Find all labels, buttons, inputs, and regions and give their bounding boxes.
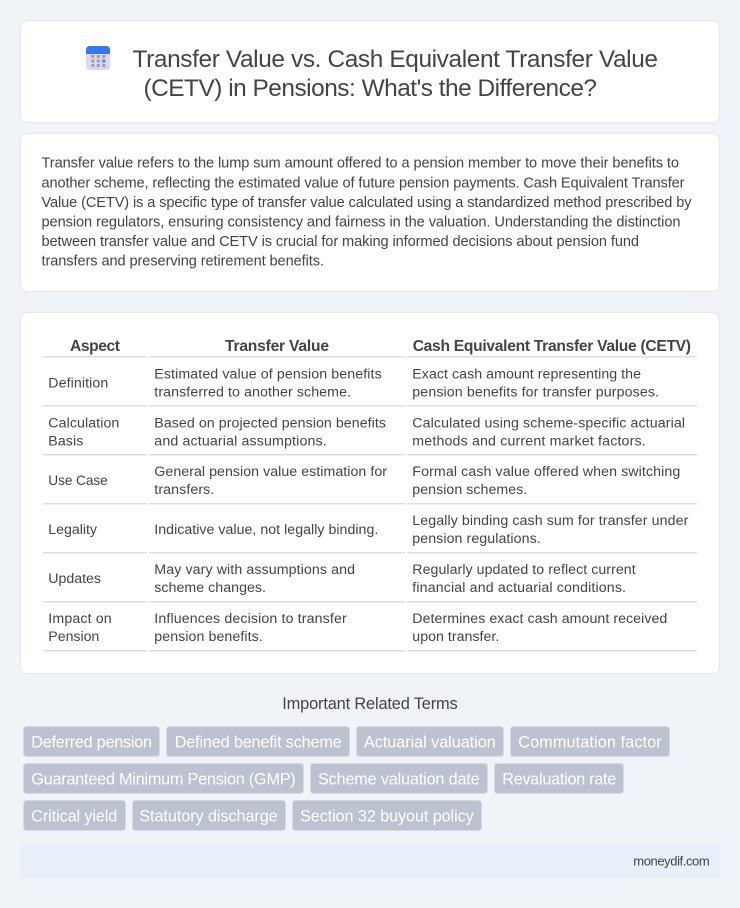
text block: introduction: between transfer value and CETV is crucial for making informed decisions about pension fund [42,234,639,250]
table header row [43,338,697,358]
text block: introduction: Transfer value refers to the lump sum amount offered to a pension member to move their benefits to [42,156,679,172]
table row: impact on pension: upon transfer. [412,629,499,645]
table header row: Cash Equivalent Transfer Value (CETV) [413,338,691,355]
tag: actuarial valuation [356,726,504,756]
title [132,46,658,102]
tag: scheme valuation date [310,764,488,794]
tag: section 32 buyout policy: Section 32 buyout policy [300,807,475,825]
table row: updates [43,562,697,602]
icon: calendar [86,46,110,70]
tag: guaranteed minimum pension: Guaranteed Minimum Pension (GMP) [31,770,296,788]
table row: impact on pension: Pension [48,629,99,645]
tag: actuarial valuation: Actuarial valuation [364,733,496,751]
table row: updates: financial and actuarial conditions. [412,580,626,596]
tag: defined benefit scheme [166,726,350,756]
table row: updates: May vary with assumptions and [154,562,355,578]
table row: definition: Definition [48,376,108,392]
panel: title card [20,20,720,122]
table row: legality: Indicative value, not legally binding. [154,522,378,538]
footer bar [20,844,720,878]
tag: deferred pension [24,726,160,756]
tag: revaluation rate: Revaluation rate [502,770,616,788]
table row: legality: Legally binding cash sum for transfer under [412,513,689,529]
table row: impact on pension: pension benefits. [154,629,263,645]
table row: legality [43,513,697,554]
heading: important related terms: Important Related Terms [282,695,458,713]
tag: critical yield: Critical yield [31,807,117,825]
title: (CETV) in Pensions: What's the Difference? [144,75,597,102]
footer bar: moneydif.com [633,853,710,868]
table row: use case: General pension value estimation for [154,464,387,480]
table row: impact on pension: Influences decision to transfer [154,611,347,627]
table header row: Aspect [70,338,120,355]
table row: calculation basis: Calculation [48,415,119,431]
title: Transfer Value vs. Cash Equivalent Transfer Value [132,46,658,73]
table row: updates: scheme changes. [154,580,266,596]
table row: definition: Exact cash amount representing the [412,366,641,382]
text block: introduction: another scheme, reflecting the estimated value of future pension payments. Cash Equivalent Transfer [42,175,685,191]
table row: calculation basis: Calculated using scheme-specific actuarial [412,415,685,431]
tag: section 32 buyout policy [292,800,482,830]
table row: calculation basis: Based on projected pension benefits [154,415,386,431]
tag: defined benefit scheme: Defined benefit scheme [175,733,342,751]
text block: introduction: transfers and preserving retirement benefits. [42,254,324,270]
table header row: Transfer Value [225,338,329,355]
table row: calculation basis: methods and current market factors. [412,433,646,449]
table row: updates: Updates [48,571,101,587]
text block: introduction: Value (CETV) is a specific type of transfer value calculated using a standardized method prescribed by [42,195,692,211]
tag: statutory discharge [132,800,286,830]
tag: commutation factor: Commutation factor [518,733,662,751]
table row: impact on pension: Determines exact cash amount received [412,611,667,627]
table row: use case: transfers. [154,482,214,498]
table row: calculation basis: Basis [48,433,83,449]
table row: use case: Use Case [48,473,108,488]
text block: introduction [42,156,692,270]
panel: intro paragraph [20,134,720,292]
table row: definition: transferred to another scheme. [154,384,351,400]
tag: scheme valuation date: Scheme valuation date [318,770,480,788]
tag: guaranteed minimum pension [24,764,304,794]
tag: revaluation rate [494,764,624,794]
table row: definition: Estimated value of pension benefits [154,366,382,382]
tag: statutory discharge: Statutory discharge [139,807,278,825]
table row: use case [43,464,697,504]
table row: definition: pension benefits for transfer purposes. [412,384,659,400]
table row: impact on pension: Impact on [48,611,112,627]
table row: use case: pension schemes. [412,482,527,498]
tag: deferred pension: Deferred pension [31,733,152,751]
table row: definition [43,366,697,406]
table row: calculation basis: and actuarial assumptions. [154,433,327,449]
tag: critical yield [24,800,126,830]
text block: introduction: pension regulators, ensuring consistency and fairness in the valuation. Understanding the distinction [42,214,680,230]
table row: legality: Legality [48,522,98,538]
tag group: related terms [24,726,670,830]
table row: calculation basis [43,415,697,456]
table row: impact on pension [43,611,697,652]
table row: use case: Formal cash value offered when switching [412,464,680,480]
panel: comparison table [20,312,720,674]
tag: commutation factor [510,726,670,756]
table row: legality: pension regulations. [412,531,541,547]
table row: updates: Regularly updated to reflect current [412,562,636,578]
